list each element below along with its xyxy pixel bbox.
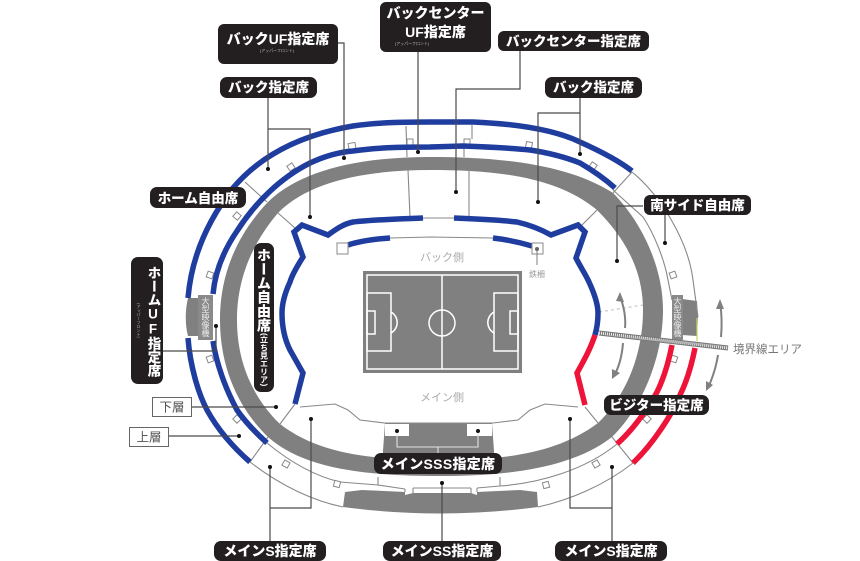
label: home free standing area	[254, 243, 274, 392]
right large screen: 大型映像機	[673, 296, 682, 337]
label: visitor reserved: ビジター指定席	[609, 397, 704, 413]
main SSS seating block	[382, 423, 495, 465]
label: back reserved left	[220, 77, 317, 98]
label: back center UF reserved: (アッパーフロント)	[395, 41, 430, 46]
label: main S reserved left: メインS指定席	[223, 543, 317, 559]
label: main SSS reserved	[374, 453, 502, 474]
blue lower bowl front line	[282, 218, 598, 404]
back side label: バック側	[420, 251, 464, 264]
blue upper tier inner arcs	[213, 146, 615, 443]
label: back UF reserved: バックUF指定席	[227, 31, 329, 47]
grey lower-tier ring	[220, 157, 663, 476]
service boxes	[206, 139, 678, 489]
label: back center UF reserved: バックセンター	[386, 5, 484, 21]
leader lines	[163, 43, 665, 541]
label: home free standing area: ホーム自由席	[256, 248, 272, 333]
stand outlines	[245, 125, 698, 507]
label: home free	[150, 187, 246, 208]
label: home UF reserved: ホームUF指定席	[146, 266, 161, 378]
right large screen	[672, 295, 698, 341]
arrows: outer boundary	[706, 299, 724, 391]
label: upper tier: 上層	[136, 430, 162, 444]
label: visitor reserved	[604, 395, 709, 415]
boundary area band	[599, 333, 728, 348]
label: main S reserved right	[555, 541, 667, 561]
label: home UF reserved	[131, 257, 163, 384]
pitch	[363, 271, 522, 373]
label: back center UF reserved	[380, 2, 491, 52]
blue upper tier outer arcs	[188, 122, 632, 462]
label: back center reserved	[498, 31, 649, 51]
inner fence line	[337, 237, 543, 265]
label: home free: ホーム自由席	[158, 190, 239, 206]
label: back reserved left: バック指定席	[228, 79, 309, 95]
left large screen	[186, 295, 213, 340]
label: back UF reserved: (アッパーフロント)	[260, 48, 295, 53]
label: south side free: 南サイド自由席	[650, 197, 745, 213]
label: main S reserved right: メインS指定席	[564, 543, 658, 559]
label: main SSS reserved: メインSSS指定席	[381, 456, 495, 472]
red visitor arcs	[577, 335, 695, 463]
label: main SS reserved	[383, 541, 501, 561]
label: back center reserved: バックセンター指定席	[506, 33, 641, 49]
boundary area text: 境界線エリア	[733, 343, 802, 356]
main side label: メイン側	[420, 391, 464, 404]
iron fence label: 鉄柵	[529, 269, 545, 279]
main SS seating block	[343, 490, 538, 514]
label: lower tier: 下層	[159, 400, 185, 414]
label: back reserved right: バック指定席	[553, 79, 634, 95]
label: back center UF reserved: UF指定席	[405, 24, 466, 40]
label: home free standing area: (立ち見エリア)	[260, 333, 268, 387]
arrows: inner boundary	[612, 292, 625, 379]
label: main SS reserved: メインSS指定席	[391, 543, 493, 559]
left large screen: 大型映像機	[201, 296, 210, 337]
label: south side free	[644, 195, 751, 215]
label: lower tier	[152, 398, 192, 416]
label: back UF reserved	[218, 24, 338, 64]
label: main S reserved left	[214, 541, 326, 561]
label: home UF reserved: (アッパーフロント)	[136, 303, 142, 338]
label: upper tier	[130, 428, 168, 446]
leader dots	[214, 150, 667, 485]
label: back reserved right	[545, 77, 642, 98]
